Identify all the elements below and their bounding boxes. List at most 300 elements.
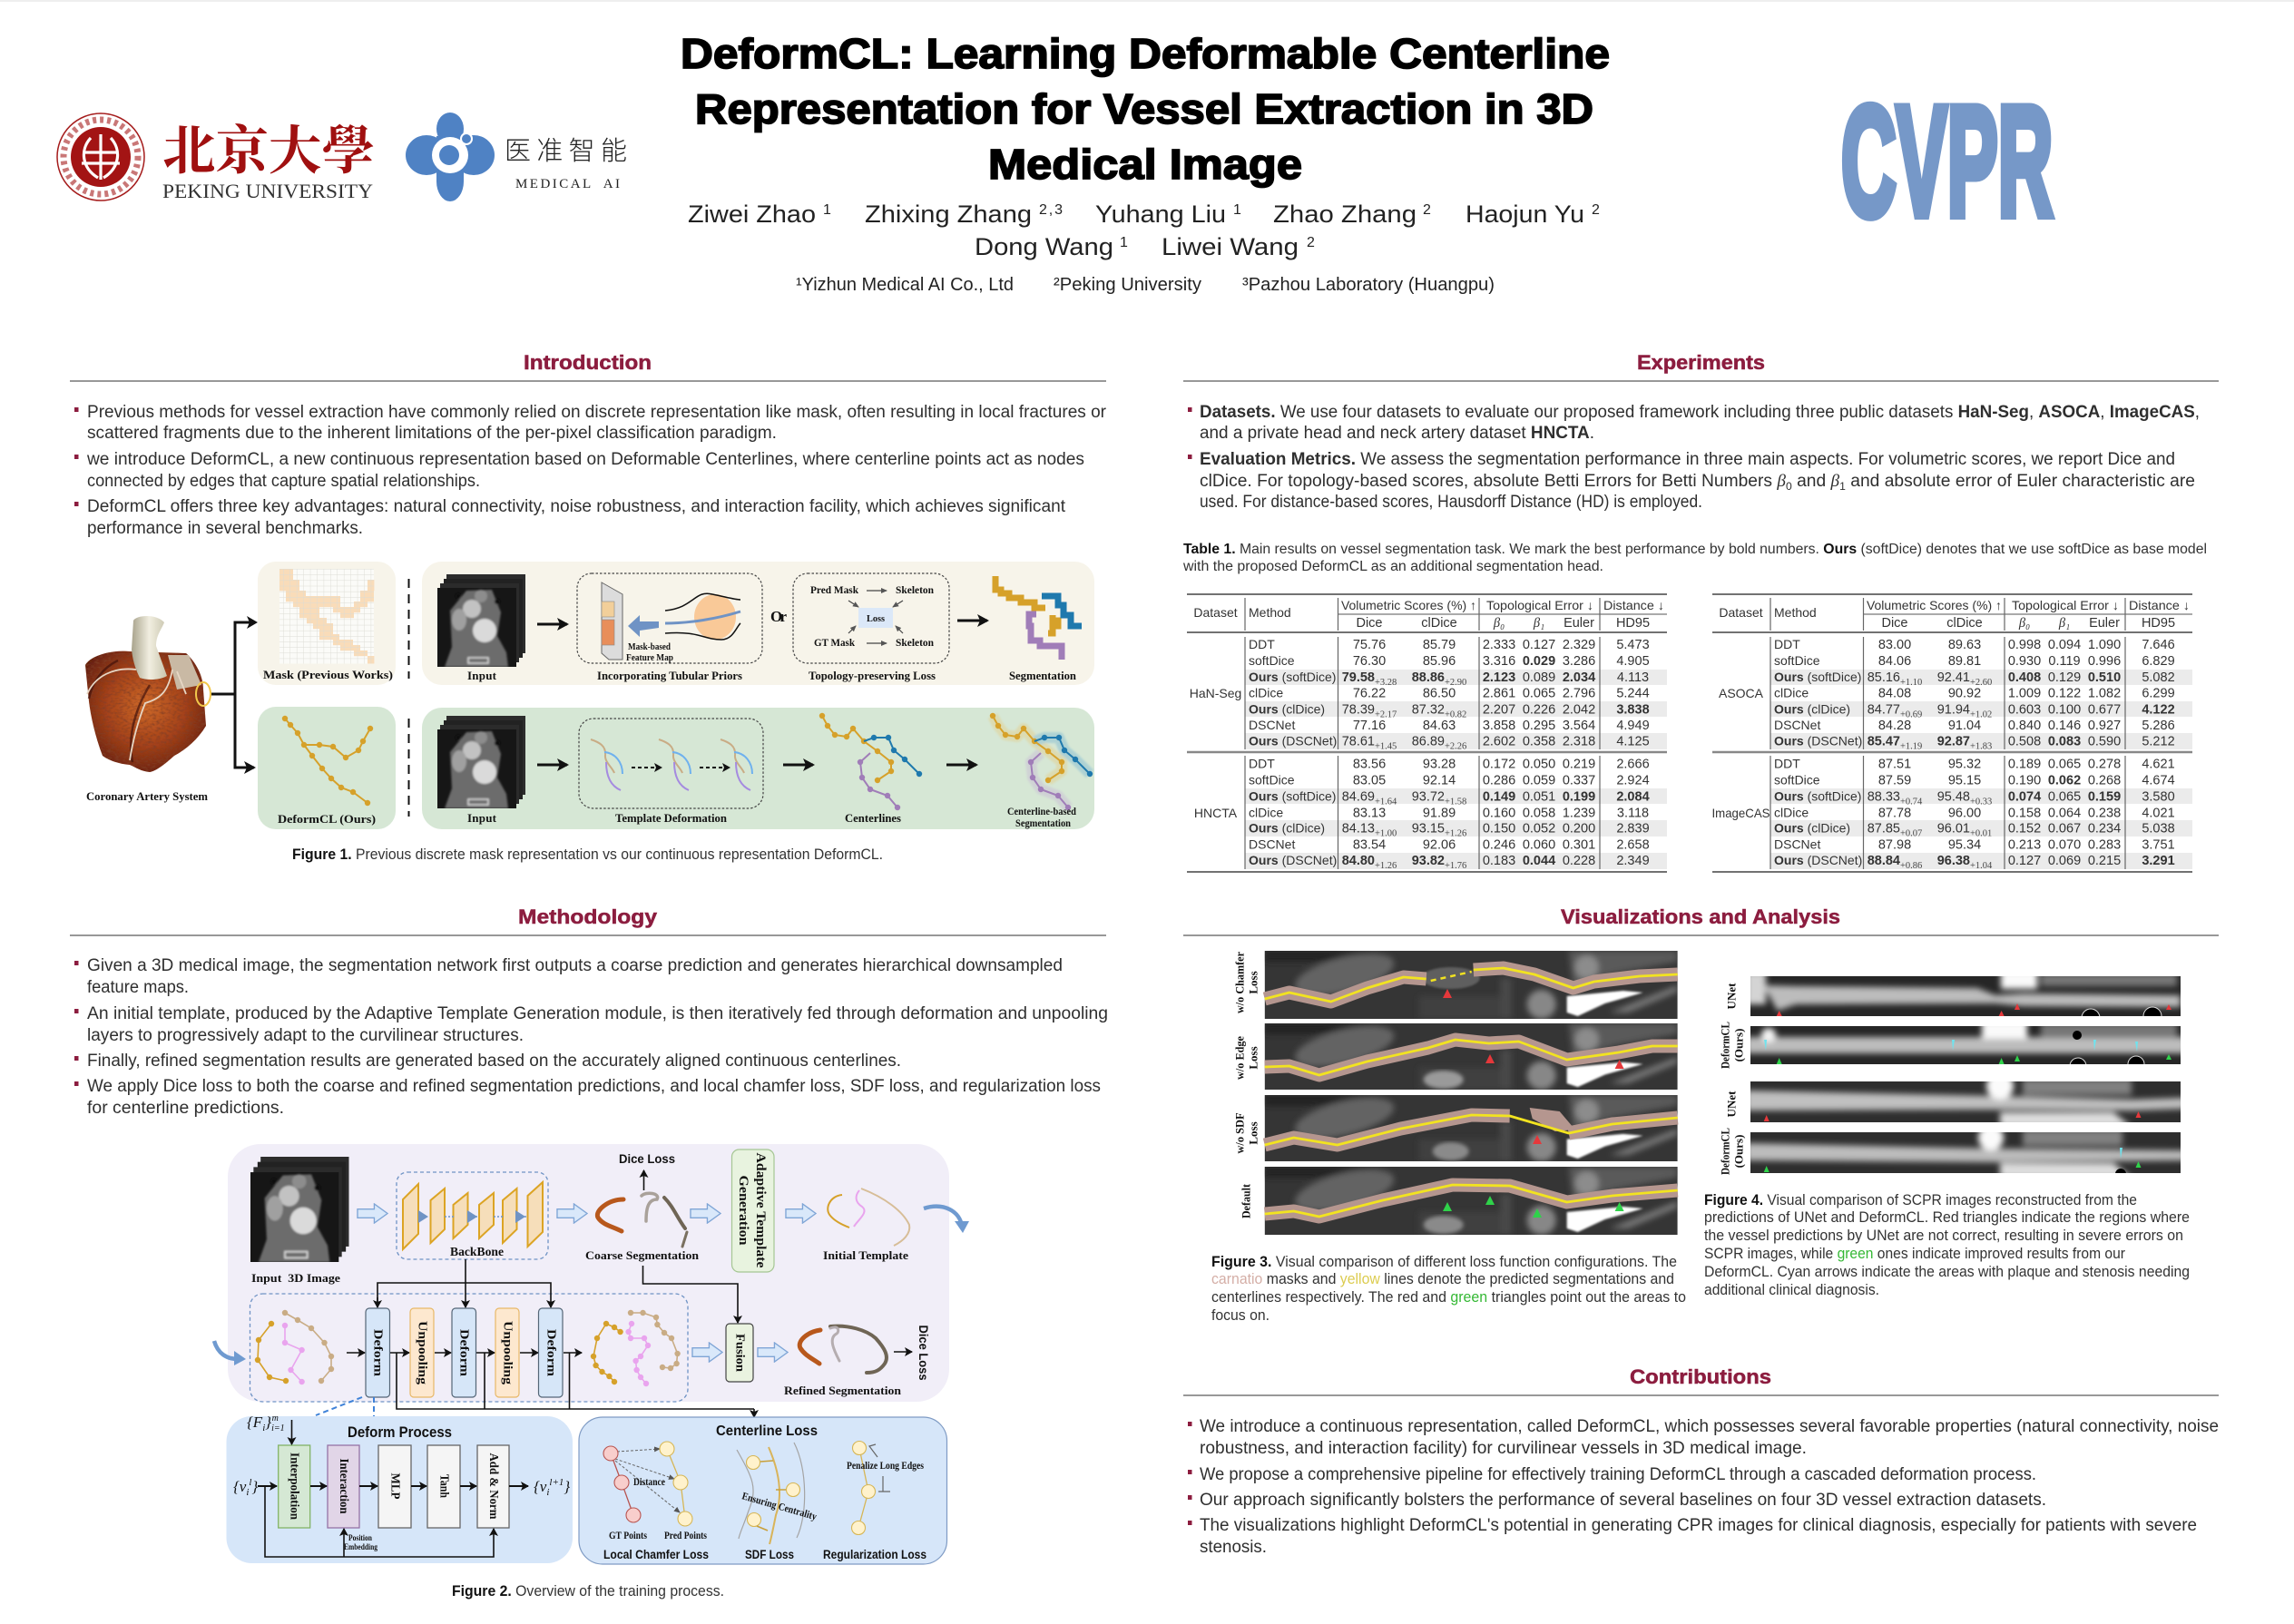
- Tanh block: Tanh: [437, 1474, 450, 1498]
- authors: Yuhang Liu: [1095, 201, 1226, 228]
- figure 1: [85, 562, 1094, 829]
- caption: figure 3: Figure 3. Visual comparison of different loss function configurations. The: [1211, 1254, 1677, 1270]
- MLP block: [378, 1445, 411, 1528]
- table values: 3.580: [2142, 789, 2175, 804]
- row labels: [1719, 983, 1746, 1175]
- table values: 3.316: [1483, 654, 1515, 669]
- table values: 84.08: [1878, 686, 1911, 700]
- add norm block: [477, 1445, 509, 1528]
- arrow: [957, 619, 987, 622]
- row labels: Loss: [1247, 1121, 1260, 1145]
- table values: 0.160: [1483, 806, 1515, 820]
- table values: 87.59: [1878, 773, 1911, 788]
- table values: 4.021: [2142, 806, 2175, 820]
- method labels: softDice: [1774, 653, 1820, 668]
- regularization graph: Penalize Long Edges: [847, 1461, 924, 1472]
- panel: mask previous works: [258, 562, 396, 685]
- text block: methodology bullets: layers to progressively adapt to the curvilinear structures.: [87, 1026, 524, 1045]
- table header: Topological Error ↓: [1486, 598, 1593, 612]
- local chamfer graph: [603, 1442, 709, 1561]
- method labels: DDT: [1774, 757, 1800, 771]
- table values: +1.76: [1445, 861, 1466, 871]
- text block: introduction bullets: [74, 403, 1107, 538]
- caption: figure 4: additional clinical diagnosis.: [1704, 1282, 1879, 1298]
- input 3D image: [250, 1157, 348, 1262]
- method labels: softDice: [1249, 653, 1295, 668]
- table values: 2.034: [1563, 670, 1595, 685]
- arrow: [358, 1204, 387, 1223]
- method labels: [1774, 637, 1862, 867]
- table values: 0.094: [2048, 638, 2081, 652]
- table values: 0.064: [2048, 806, 2081, 820]
- table header: Dice: [1356, 616, 1383, 631]
- table values: +1.45: [1375, 742, 1397, 751]
- arrow: [946, 764, 976, 766]
- Tanh block: [427, 1445, 460, 1528]
- row: UNet b: [1750, 1081, 2181, 1122]
- table values: 96.01: [1937, 822, 1970, 836]
- table values: +1.10: [1900, 678, 1922, 688]
- text block: methodology bullets: An initial template, produced by the Adaptive Template Generation module, is then iteratively fed through deformation and unpooling: [87, 1004, 1108, 1023]
- table header: Dataset: [1193, 605, 1238, 620]
- arrowhead out: [955, 1221, 969, 1233]
- table values: 0.065: [1523, 686, 1555, 700]
- table values: 0.358: [1523, 735, 1555, 749]
- text block: contributions bullets: [1188, 1417, 2219, 1557]
- table values: 0.286: [1483, 773, 1515, 788]
- table values: 0.996: [2088, 654, 2121, 669]
- row labels: DeformCL: [1719, 1022, 1731, 1069]
- caption: figure 3: focus on.: [1211, 1307, 1270, 1324]
- arrow: [692, 1343, 722, 1362]
- label: input: Input: [467, 669, 497, 682]
- table values: +0.07: [1900, 829, 1922, 838]
- table values: 83.54: [1353, 838, 1386, 853]
- row labels: UNet: [1724, 1091, 1739, 1117]
- table values: 0.065: [2048, 757, 2081, 771]
- table header: HD95: [1616, 616, 1650, 631]
- table values: 3.751: [2142, 838, 2175, 853]
- table values: 0.200: [1563, 822, 1595, 836]
- authors: Zhao Zhang: [1273, 201, 1417, 228]
- table values: 88.86: [1412, 670, 1445, 685]
- row labels: (Ours): [1731, 1029, 1746, 1061]
- row: without sdf: [1265, 1090, 1678, 1161]
- adaptive template generation: [731, 1150, 774, 1272]
- arrow head upper: [247, 616, 258, 629]
- table header: clDice: [1421, 616, 1457, 631]
- text block: methodology bullets: Finally, refined segmentation results are generated based on the accurately aligned continuous centerlines.: [87, 1052, 901, 1071]
- table values: 4.122: [2142, 702, 2175, 717]
- table values: 2.207: [1483, 702, 1515, 717]
- table values: 85.96: [1423, 654, 1456, 669]
- table values: 2.658: [1616, 838, 1650, 853]
- heart illustration: [85, 616, 206, 772]
- table header: Method: [1249, 605, 1291, 620]
- label: deform process: Deform Process: [348, 1423, 452, 1441]
- table header: Dice: [1881, 616, 1908, 631]
- caption: figure 4: DeformCL. Cyan arrows indicate the areas with plaque and stenosis needing: [1704, 1264, 2190, 1280]
- math labels: m: [272, 1414, 279, 1423]
- panel: deform process: [227, 1414, 573, 1563]
- caption: table 1: Table 1. Main results on vessel segmentation task. We mark the best performance by bold numbers. Ours (softDice) denotes that we use softDice as base model: [1183, 542, 2207, 557]
- label: input: Input: [467, 811, 497, 825]
- table values: 84.28: [1878, 719, 1911, 733]
- table values: 83.00: [1878, 638, 1911, 652]
- panel: main pipeline: [228, 1144, 949, 1402]
- adaptive template generation: Adaptive Template: [753, 1152, 768, 1268]
- table values: 76.30: [1353, 654, 1386, 669]
- caption: figure 4: [1704, 1192, 2190, 1298]
- authors: 2: [1592, 202, 1600, 218]
- interaction block: [328, 1445, 359, 1528]
- table values: 0.508: [2008, 735, 2041, 749]
- table values: 87.98: [1878, 838, 1911, 853]
- regularization graph: [823, 1441, 926, 1561]
- table values: 78.61: [1342, 735, 1375, 749]
- blue dashed links: [316, 1397, 374, 1416]
- table values: 5.082: [2142, 670, 2175, 685]
- or: Or: [770, 608, 787, 625]
- caption: table 1: [1182, 542, 2207, 574]
- table values: 0.152: [2008, 822, 2041, 836]
- topology loss box: Pred Mask: [810, 585, 859, 596]
- table values: 2.329: [1563, 638, 1595, 652]
- deform and unpooling blocks: Deform: [370, 1329, 385, 1376]
- logo: Medical AI: [406, 113, 627, 201]
- table header: Topological Error ↓: [2012, 598, 2119, 612]
- fusion block: Fusion: [733, 1334, 746, 1372]
- label: DeformCL: DeformCL (Ours): [278, 812, 376, 826]
- table values: 4.113: [1617, 670, 1649, 685]
- table header: Distance ↓: [2129, 598, 2190, 612]
- input CT top: [437, 574, 525, 667]
- panel: previous pipeline: [422, 562, 1094, 685]
- row: UNet a: [1750, 976, 2181, 1016]
- arrow: [894, 1351, 912, 1353]
- method labels: Ours (clDice): [1249, 702, 1325, 717]
- label: tubular: Incorporating Tubular Priors: [597, 669, 742, 682]
- backbone: [397, 1172, 548, 1259]
- table values: 2.333: [1483, 638, 1515, 652]
- table: right: [1711, 594, 2192, 872]
- table header: HD95: [2142, 616, 2175, 631]
- table values: +1.83: [1970, 742, 1992, 751]
- mask grid: [279, 569, 374, 664]
- table values: 4.674: [2142, 773, 2175, 788]
- dataset labels: HaN-Seg: [1190, 686, 1241, 700]
- text block: contributions bullets: The visualizations highlight DeformCL's potential in generating CPR images for clinical diagnosis, especially for patients with severe: [1200, 1516, 2197, 1535]
- arrows: cyan: [1764, 1040, 2138, 1159]
- method labels: softDice: [1774, 773, 1820, 788]
- table values: 91.04: [1948, 719, 1981, 733]
- row labels: [1232, 952, 1260, 1218]
- interpolation block: Interpolation: [287, 1453, 301, 1520]
- table values: 0.268: [2088, 773, 2121, 788]
- text block: methodology bullets: for centerline predictions.: [87, 1099, 284, 1118]
- logo: Peking University: [57, 108, 375, 202]
- caption: figure 3: centerlines respectively. The red and green triangles point out the areas to: [1211, 1289, 1686, 1306]
- method labels: Ours (DSCNet): [1774, 853, 1862, 867]
- table values: 96.38: [1937, 854, 1970, 868]
- deform and unpooling blocks: Deform: [544, 1329, 557, 1376]
- table values: 0.238: [2088, 806, 2121, 820]
- topology loss box: [793, 573, 949, 663]
- math labels: i: [246, 1487, 249, 1498]
- table header: β₁: [1533, 616, 1544, 631]
- text block: contributions bullets: We propose a comprehensive pipeline for effectively training DeformCL through a cascaded deformation process.: [1200, 1465, 2036, 1484]
- local chamfer graph: GT Points: [609, 1531, 647, 1541]
- method labels: clDice: [1774, 686, 1809, 700]
- table values: 0.051: [1523, 789, 1555, 804]
- table values: 2.666: [1616, 757, 1650, 771]
- table values: 87.85: [1868, 822, 1900, 836]
- arrow: flow in: [214, 1341, 238, 1359]
- dataset labels: ImageCAS: [1711, 806, 1770, 820]
- table values: 88.33: [1868, 789, 1900, 804]
- table values: 6.829: [2142, 654, 2175, 669]
- table values: 0.213: [2008, 838, 2041, 853]
- text block: contributions bullets: stenosis.: [1200, 1538, 1267, 1557]
- table values: +0.01: [1970, 829, 1992, 838]
- table values: 0.840: [2008, 719, 2041, 733]
- table values: 0.246: [1483, 838, 1515, 853]
- table values: 5.038: [2142, 822, 2175, 836]
- table values: 0.215: [2088, 854, 2121, 868]
- math labels: l: [249, 1477, 251, 1488]
- text block: introduction bullets: scattered fragments due to the inherent limitations of the per-pixel classification paradigm.: [87, 424, 777, 443]
- text block: introduction bullets: we introduce DeformCL, a new continuous representation based on Deformable Centerlines, where centerline points act as nodes: [86, 450, 1084, 469]
- table values: +1.04: [1970, 861, 1993, 871]
- row labels: UNet: [1724, 983, 1739, 1009]
- label: input 3D: Input 3D Image: [251, 1271, 340, 1285]
- SDF graph: SDF Loss: [745, 1548, 794, 1561]
- backbone: BackBone: [450, 1246, 504, 1259]
- table values: +1.26: [1375, 861, 1397, 871]
- caption: table 1: with the proposed DeformCL as an additional segmentation head.: [1182, 559, 1603, 574]
- table values: 0.052: [1523, 822, 1555, 836]
- label: position embedding: Embedding: [344, 1543, 377, 1552]
- method labels: Ours (DSCNet): [1249, 733, 1337, 748]
- row: without chamfer: [1265, 945, 1678, 1019]
- table values: 1.239: [1563, 806, 1595, 820]
- math labels: i=1: [271, 1423, 285, 1433]
- method labels: Ours (softDice): [1249, 789, 1336, 804]
- table values: 0.127: [1523, 638, 1555, 652]
- local chamfer graph: Pred Points: [664, 1531, 707, 1541]
- table values: 1.009: [2008, 686, 2041, 700]
- math labels: }: [564, 1478, 570, 1495]
- table values: 93.28: [1423, 757, 1456, 771]
- table values: 96.00: [1948, 806, 1981, 820]
- table values: 1.090: [2088, 638, 2121, 652]
- label: centerline-based: Segmentation: [1015, 817, 1071, 829]
- row labels: Default: [1240, 1183, 1252, 1218]
- table values: +0.82: [1445, 709, 1466, 720]
- method labels: Ours (DSCNet): [1249, 853, 1337, 867]
- table header: [1193, 598, 1664, 631]
- row: DeformCL a: [1750, 1026, 2181, 1064]
- method labels: Ours (clDice): [1774, 820, 1850, 835]
- table header: [1719, 598, 2190, 631]
- table values: 95.48: [1937, 789, 1970, 804]
- math labels: }: [251, 1478, 258, 1495]
- row labels: DeformCL: [1719, 1128, 1731, 1175]
- table header: Dataset: [1719, 605, 1763, 620]
- chain: DeformCL ours: [285, 719, 370, 803]
- deform and unpooling blocks: Unpooling: [501, 1321, 514, 1384]
- arrow: [537, 622, 567, 626]
- table values: 4.621: [2142, 757, 2175, 771]
- math labels: }: [265, 1414, 271, 1431]
- regularization graph: Regularization Loss: [823, 1548, 926, 1561]
- figure 3: [1232, 945, 1678, 1235]
- table values: 85.47: [1868, 735, 1900, 749]
- table values: 84.80: [1342, 854, 1375, 868]
- table: left: [1187, 594, 1667, 872]
- table values: 87.51: [1878, 757, 1911, 771]
- table header: Method: [1774, 605, 1817, 620]
- table values: 87.78: [1878, 806, 1911, 820]
- panel: ours pipeline: [422, 708, 1094, 829]
- table values: 0.234: [2088, 822, 2121, 836]
- text block: contributions bullets: robustness, and interaction facility) for curvilinear vessels in 3D medical image.: [1200, 1439, 1807, 1458]
- row: DeformCL b: [1750, 1132, 2181, 1173]
- table values: 0.278: [2088, 757, 2121, 771]
- table values: 95.15: [1948, 773, 1981, 788]
- table values: +2.17: [1375, 709, 1397, 720]
- table values: 95.34: [1948, 838, 1981, 853]
- interpolation block: [279, 1445, 310, 1528]
- table values: 0.408: [2008, 670, 2041, 685]
- method labels: clDice: [1249, 806, 1283, 820]
- panel: DeformCL ours: [258, 707, 396, 829]
- table values: 0.228: [1563, 854, 1595, 868]
- table values: 92.14: [1423, 773, 1456, 788]
- text block: methodology bullets: We apply Dice loss to both the coarse and refined segmentation predictions, and local chamfer loss, SDF loss, and regularization loss: [87, 1077, 1101, 1096]
- table values: 0.172: [1483, 757, 1515, 771]
- table values: 88.84: [1868, 854, 1900, 868]
- fusion block: [726, 1324, 753, 1382]
- table header: clDice: [1946, 616, 1983, 631]
- connectors from backbone: [377, 1259, 738, 1323]
- method labels: clDice: [1249, 686, 1283, 700]
- table values: 3.118: [1617, 806, 1649, 820]
- table values: +0.69: [1900, 709, 1922, 720]
- text block: introduction bullets: performance in several benchmarks.: [87, 519, 363, 538]
- tubular priors box: Feature Map: [626, 653, 673, 663]
- table values: 2.084: [1616, 789, 1650, 804]
- centerlines: [822, 716, 919, 807]
- caption: figure 1: Figure 1. Previous discrete mask representation vs our continuous representation DeformCL.: [292, 846, 883, 863]
- method labels: clDice: [1774, 806, 1809, 820]
- dataset labels: [1711, 686, 1770, 820]
- SDF graph: [737, 1443, 818, 1561]
- add norm block: Add & Norm: [486, 1453, 500, 1520]
- table values: +2.60: [1970, 678, 1992, 688]
- template chain right: [593, 1313, 678, 1384]
- table values: 84.06: [1878, 654, 1911, 669]
- authors: 2: [1423, 202, 1431, 218]
- arrow: [557, 1204, 587, 1223]
- math labels: [233, 1414, 570, 1498]
- table values: 93.15: [1412, 822, 1445, 836]
- table values: 0.062: [2048, 773, 2081, 788]
- authors: 2,3: [1039, 202, 1063, 218]
- segmentation pixels: [995, 576, 1082, 660]
- template deformation: [579, 719, 763, 808]
- math labels: {F: [247, 1414, 262, 1431]
- deform and unpooling blocks: Deform: [457, 1329, 470, 1376]
- math labels: {v: [233, 1478, 246, 1495]
- arrow: [786, 1204, 816, 1223]
- label: dice loss: Dice Loss: [619, 1152, 675, 1166]
- topology loss box: GT Mask: [814, 638, 856, 649]
- logo: CVPR: CVPR: [1841, 73, 2053, 249]
- text block: contributions bullets: We introduce a continuous representation, called DeformCL, which possesses several favorable properties (natural connectivity, noise: [1200, 1417, 2219, 1436]
- row: default: [1265, 1161, 1678, 1235]
- callout ring: [196, 682, 211, 706]
- table values: 79.58: [1342, 670, 1375, 685]
- table values: 0.100: [2048, 702, 2081, 717]
- table values: 0.058: [1523, 806, 1555, 820]
- centerline-based segmentation: [993, 716, 1090, 807]
- table values: 0.226: [1523, 702, 1555, 717]
- table values: 0.069: [2048, 854, 2081, 868]
- heading: Introduction: Introduction: [524, 351, 652, 374]
- table values: 0.065: [2048, 789, 2081, 804]
- triangles: green: [1443, 1196, 1624, 1218]
- label: centerlines: Centerlines: [845, 811, 901, 825]
- logo: Medical AI: MEDICAL AI: [515, 177, 620, 191]
- table values: 84.69: [1342, 789, 1375, 804]
- table values: +1.02: [1970, 709, 1992, 720]
- table values: 83.13: [1353, 806, 1386, 820]
- text block: experiments bullets: Evaluation Metrics. We assess the segmentation performance in three main aspects. For volumetric scores, we report Dice and: [1200, 450, 2175, 469]
- title: Representation for Vessel Extraction in 3D: [695, 85, 1593, 132]
- logo: Peking University: 北京大學: [162, 108, 375, 184]
- dashed deform region: [250, 1294, 688, 1402]
- label: template: Template Deformation: [615, 811, 728, 825]
- input CT bottom: [437, 716, 525, 808]
- label: centerline loss: Centerline Loss: [716, 1423, 818, 1439]
- table values: 0.183: [1483, 854, 1515, 868]
- text block: experiments bullets: Datasets. We use four datasets to evaluate our proposed framework including three public datasets HaN-Seg, ASOCA, ImageCAS,: [1200, 403, 2200, 422]
- authors: Dong Wang: [975, 233, 1113, 260]
- table values: 83.05: [1353, 773, 1386, 788]
- heading: Experiments: Experiments: [1637, 351, 1765, 374]
- row labels: w/o SDF: [1232, 1112, 1247, 1154]
- text block: experiments bullets: clDice. For topology-based scores, absolute Betti Errors for Betti Numbers β0 and β1 and absolute error of Euler characteristic are: [1200, 472, 2195, 493]
- arrow: [537, 764, 567, 766]
- table values: 2.349: [1616, 854, 1650, 868]
- table values: 0.677: [2088, 702, 2121, 717]
- arrowhead in: [234, 1351, 246, 1365]
- table values: 4.905: [1616, 654, 1650, 669]
- table values: 0.146: [2048, 719, 2081, 733]
- row labels: Loss: [1247, 1046, 1260, 1070]
- table values: 3.564: [1563, 719, 1595, 733]
- authors: 1: [1233, 202, 1241, 218]
- text block: introduction bullets: connected by edges that capture spatial relationships.: [87, 472, 480, 491]
- triangles: green: [1764, 1054, 2171, 1172]
- authors: 2: [1307, 235, 1315, 250]
- row: without edge: [1265, 1018, 1678, 1090]
- table values: +2.90: [1445, 678, 1466, 688]
- deform and unpooling blocks: Unpooling: [416, 1321, 428, 1384]
- table values: 0.603: [2008, 702, 2041, 717]
- affiliations: ¹Yizhun Medical AI Co., Ltd: [796, 275, 1014, 295]
